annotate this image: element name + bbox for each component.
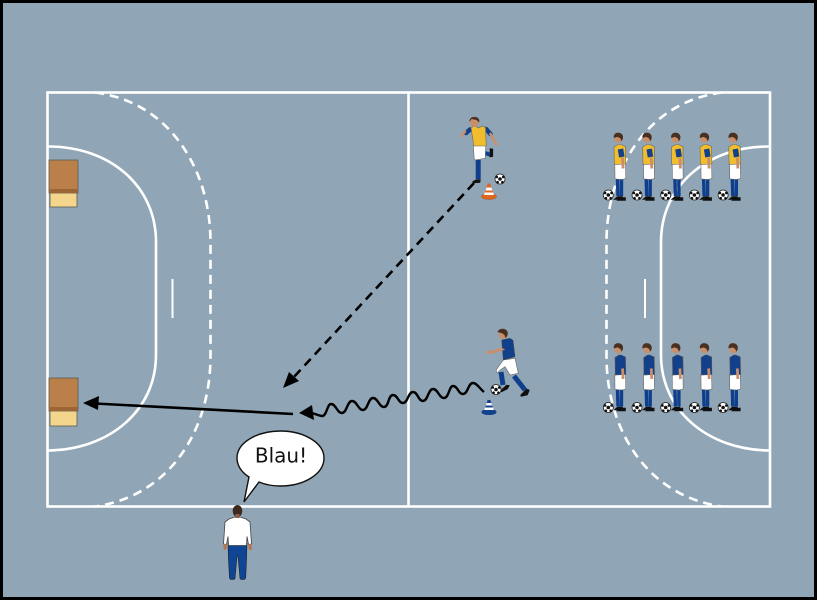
left goal area (47, 146, 156, 450)
blue runner (488, 329, 530, 396)
coach (224, 505, 252, 580)
speech text: Blau! (255, 444, 307, 468)
top goal (49, 160, 78, 207)
left free throw line (95, 92, 210, 506)
bottom goal (49, 378, 78, 426)
yellow team queue (603, 133, 741, 200)
court lines (47, 92, 770, 506)
speech bubble (237, 431, 324, 502)
right goal area (661, 146, 770, 450)
blue cone (482, 400, 496, 415)
top ball (495, 174, 505, 184)
blue ball (491, 384, 501, 394)
wavy arrow: dribble (299, 383, 484, 420)
orange cone (482, 184, 496, 199)
dashed arrow: pass (283, 183, 474, 388)
yellow runner (462, 117, 496, 183)
solid arrow: shot (83, 396, 293, 414)
blue team queue (603, 343, 741, 412)
right free throw line (606, 92, 722, 506)
